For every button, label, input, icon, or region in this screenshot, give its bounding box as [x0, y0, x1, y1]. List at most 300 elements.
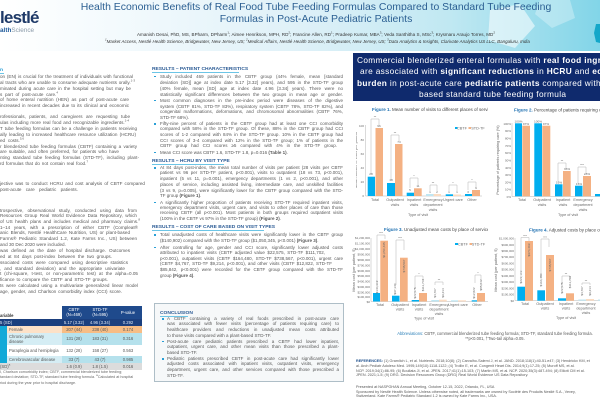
text block: methods: , and standard deviation) and the appropriate univariate [0, 266, 125, 271]
figure 2 axes: 60% [505, 151, 511, 155]
text block: HCRU bullets: emergency department visits, urgent care, and visits to other places of care than those [160, 205, 343, 210]
figure 4 axes: $300,000 [501, 280, 514, 284]
figure 2 category labels [518, 198, 594, 217]
figure 1 legend: CBTF [457, 126, 468, 130]
figure 4 value labels: $164,480 [539, 273, 543, 286]
heading: results HCRU by visit type: RESULTS – HCRU BY VISIT TYPE [152, 158, 230, 164]
text block: presentation and sponsor note [356, 385, 576, 398]
figure 3 title: Figure 3. Unadjusted mean costs by place of service [384, 227, 488, 232]
figure 2 axes: 10% [505, 188, 511, 192]
heading: conclusion: CONCLUSION [160, 310, 193, 316]
text block: patient characteristics bullets: Mean CCI score was CBTF 1.6, STD-TF 1.8, p=0.016 (Table 1). [160, 150, 288, 155]
figure 3 category labels: Urgent care [448, 303, 468, 307]
text block: methods: and 30 Dec 2020 were included. [0, 242, 66, 247]
text block: cost of care bullets: $85,842, p<0.001) were recorded for the CBTF group compared with the STD-TF [160, 267, 343, 272]
figure 3 category labels: department [429, 308, 450, 312]
table header row: (N=595) [92, 312, 108, 317]
figure 2 category labels: Inpatient [556, 198, 571, 202]
table row: CCI score: 1.6 (0.9) [66, 364, 82, 369]
text block: cost of care bullets: (CBTF $4,767, STD-TF $9,214, p<0.001), and other visits (CBTF $12,822, STD-TF [160, 261, 332, 266]
table row: cerebrovascular disease [7, 356, 142, 363]
figure 3 axes: $200,000 [357, 290, 370, 294]
figure 1 category labels: visits [429, 208, 437, 212]
figure 2 axes: 20% [505, 180, 511, 184]
text block: cost of care bullets: After controlling for age, gender and CCI score, significantly lower adjusted costs [160, 245, 343, 250]
panel: conclusion [154, 303, 344, 382]
figure 4 category labels: department [576, 306, 597, 310]
text block: introduction: r blenderized tube feeding formulas (CBTF) containing a variety [0, 144, 137, 149]
text block: conclusion bullets: adjusted costs associated with inpatient visits, outpatient visits, emergency [167, 361, 339, 366]
table row: chronic pulmonary disease: 131 (28) [66, 336, 82, 341]
table row: CCI score: 0.016 [123, 364, 133, 369]
figure 1 value labels: 1 [448, 190, 450, 194]
text block: methods: ts were calculated using a multivariate generalized linear model [0, 283, 138, 288]
table row: cerebrovascular disease: 33 (7) [69, 357, 79, 362]
figure 3 axes: $300,000 [357, 285, 370, 289]
figure 2 category labels: Type of visit [558, 213, 579, 217]
figure 2 axes: 50% [505, 158, 511, 162]
figure 4 category labels [521, 302, 597, 320]
table row: CCI score: 1.8 (1.5) [92, 364, 108, 369]
figure 1 significance brackets: ** [432, 181, 435, 185]
table row: chronic pulmonary disease: Chronic pulmonary [9, 334, 44, 339]
figure 2 category labels: visits [579, 208, 587, 212]
figure 1 axes: 60 [361, 152, 364, 156]
figure 2 category labels: Total [518, 198, 526, 202]
figure 1 axes: 80 [361, 138, 364, 142]
text block: introduction: ulas including more real food and recognizable ingredients.1-4 [0, 119, 129, 125]
figure 4 bars [517, 241, 600, 301]
figure 1 value labels [369, 124, 477, 194]
figure 4 significance brackets: *** [523, 234, 528, 238]
figure 1 category labels: Other [467, 198, 477, 202]
text block: objective: post-acute care pediatric patients. [0, 187, 78, 192]
figure 1 category labels: Type of visit [408, 213, 429, 217]
figure 3 value labels: $4,767 [433, 288, 437, 298]
text block: introduction: nting standard tube feeding formulas (STD-TF), including plant- [0, 155, 139, 160]
text block: conclusion bullets: to those visits compared with a plant-based STD-TF. [167, 333, 271, 338]
figure 4 value labels: $4,767 [580, 286, 584, 296]
figure 4 axes: $500,000 [501, 268, 514, 272]
heading: introduction [0, 68, 4, 74]
text block: patient characteristics bullets: CBTF group had CCI scores ≥5 compared with 4% in the STD-TF group. [160, 143, 337, 148]
figure 3 significance brackets: ** [438, 278, 441, 282]
text block: introduction: ed costs.5,6 [0, 136, 24, 143]
figure 2 axes: 30% [505, 173, 511, 177]
text block: patient characteristics bullets: CCI scores of 3-4 compared with 12% in the STD-TF group; 1% of patients in the [160, 138, 343, 143]
figure 3 category labels: Emergency [429, 303, 449, 307]
text block: patient characteristics bullets: (40% female, mean [SD] age at index date 4.96 [3.34] years). There were no [160, 86, 343, 91]
text block: HCRU bullets: At 84 days post-index, the mean total number of visits per patient (28 visits per CBTF [160, 165, 343, 170]
figure 2 axes: 90% [505, 129, 511, 133]
table row: age: 4.96 (3.34) [90, 320, 110, 325]
figure 4 significance brackets: ** [585, 279, 588, 283]
figure 3 axes: $1,200,000 [355, 236, 370, 240]
table row: cerebrovascular disease: 0.985 [123, 357, 133, 362]
figure 1 significance brackets: * [452, 181, 454, 185]
text block: conclusion bullets: STD-TF. [167, 373, 184, 378]
text block: references: REFERENCES: (1) Gramlich L, et al. Nutrients. 2018;10(8); (2) Carvalho-Salemi J, et al. JAND. 2018;118(1):40-51.e47; (3) Hendrickx KM, et [356, 359, 590, 363]
table footnotes [0, 370, 133, 385]
figure 1 category labels: Outpatient [386, 198, 405, 202]
text block: methods: of US health plans and includes medical and pharmacy claims.8 [0, 217, 140, 224]
figure 4 category labels: Outpatient [536, 302, 555, 306]
text block: introduction: al tracts who are unable to consume adequate nutrients orally.1-3 [0, 78, 135, 84]
figure 1 value labels: 9 [475, 186, 477, 190]
icon: decorative hexagons [488, 0, 600, 48]
figure 3 axes: $1,100,000 [355, 242, 370, 246]
text block: introduction: s part of post-acute care.4 [0, 90, 58, 96]
text block: methods: age, gender, and Charlson comorbidity index (CCI) score. [0, 289, 122, 294]
table header row [0, 306, 142, 319]
text block: conclusion bullets: was associated with fewer visits (percentage of patients requiring care) to [167, 321, 339, 326]
figure 1 value labels: 18 [389, 178, 393, 182]
text block: cost of care bullets: ($140,902) compared with the STD-TF group ($1,050,345, p<0.001) (Figure 3). [160, 238, 318, 243]
table header row: STD-TF [93, 307, 107, 312]
title [81, 2, 551, 25]
authors: Amanish Desai, PhD, MS, BPharm, DPharm1; Aimee Henrikson, MPH, RD2; Francine Allen, RD1; Pradeep Kumar, MBA3; Veda Santhitha S, MSc3; Krysmaru Araujo Torres, MD2 [137, 30, 495, 37]
figure 3 value labels: $1,050,345 [382, 242, 386, 258]
table row: age [0, 318, 142, 326]
text block: patient characteristics bullets: congenital malformations, deformations, and chromosomal abnormalities (CBTF 76%, [160, 109, 343, 114]
figure 2 axes: 0% [507, 195, 511, 199]
figure 4 value labels: $970,469 [527, 243, 531, 256]
figure 1 bars [368, 128, 480, 196]
figure 3 axes: $1,000,000 [355, 247, 370, 251]
text block: HCRU bullets: receiving CBTF (all p<0.001). Most patients in both groups required outpatient visits [160, 210, 343, 215]
text block: conclusion bullets: department, urgent care, and other services compared with those prescribed a [167, 367, 339, 372]
text block: patient characteristics bullets: statistically significant differences between the two groups in mean age or gender. [160, 92, 343, 97]
figure 4 axes: $800,000 [501, 249, 514, 253]
figure 3 category labels: visits [415, 308, 423, 312]
text block: references: al. Arch Pediatr Adolesc Med. 1995;149(10):1118-1122; (4) Trollin E, et al. Congenit Heart Dis. 2014;9(1):17-25; (5) Muroff MS, et al. [356, 364, 575, 368]
figure 3 legend: CBTF [458, 242, 469, 246]
text block: presentation and sponsor note: Presented at NASPGHAN Annual Meeting, October 12-15, 2022, Orlando, FL, USA [356, 385, 494, 389]
table footnotes: riod during the year prior to hospital discharge. [0, 381, 76, 385]
table footnotes: tandard deviation; STD-TF, standard tube feeding formula. a Calculated at hospital [0, 373, 133, 379]
table header row: CBTF [69, 307, 79, 312]
figure 1 axes: 100 [359, 124, 364, 128]
figure 1 significance brackets: * [413, 174, 415, 178]
figure 3 axes: $100,000 [357, 295, 370, 299]
figure 1 significance brackets [371, 115, 476, 191]
figure 1 axes: 0 [362, 194, 364, 198]
figure 4 axes: $200,000 [501, 286, 514, 290]
figure 3 legend: STD-TF [472, 242, 486, 246]
figure 1 value labels: 73 [397, 140, 401, 144]
table row: paraplegia and hemiplegia: Paraplegia and hemiplegia [9, 348, 59, 353]
figure 3 significance brackets: * [477, 271, 479, 275]
heading: introduction: n [0, 68, 3, 73]
figure 4 value labels: $9,214 [588, 286, 592, 296]
text block: conclusion bullets: Post-acute care pediatric patients prescribed a CBTF had lower inpatient, [167, 339, 339, 344]
figure 3 axes: $600,000 [357, 269, 370, 273]
text block: conclusion bullets: based STD-TF. [167, 350, 197, 355]
figure 1 value labels: 1 [456, 190, 458, 194]
figure 2 value labels: 97% [523, 122, 529, 126]
figure 2 significance brackets [558, 159, 586, 183]
heading: results patient characteristics: RESULTS – PATIENT CHARACTERISTICS [152, 67, 248, 72]
figure 4 axes [494, 236, 600, 303]
text block: methods: trospective, observational study, conducted using data from [0, 208, 137, 213]
text block: abbreviations: **p<0.001, †Two-tail alpha=0.05. [465, 336, 525, 341]
text block: patient characteristics bullets: deviation {SD}] age at index date 5.17 [3.32] years), and 595 in the STD-TF group [160, 80, 343, 85]
figure 2 axes: 70% [505, 144, 511, 148]
table side band [0, 326, 7, 363]
figure 3 axes: $900,000 [357, 252, 370, 256]
table row: paraplegia and hemiplegia [7, 345, 142, 356]
text block: methods: ssociated costs were compared using descriptive statistics [0, 260, 128, 265]
text block: HCRU bullets: TF group (Figure 1). [160, 193, 201, 198]
figure 1 category labels: Total [371, 198, 379, 202]
table row: chronic pulmonary disease: disease [9, 339, 23, 344]
figure 3 axes: $400,000 [357, 280, 370, 284]
text block: introduction: rd formulas that do not contain real food.7 [0, 159, 88, 166]
table row: female: Female [9, 327, 23, 332]
table row: chronic pulmonary disease [7, 333, 142, 345]
text block: HCRU bullets: patient vs 96 per STD-TF patient, p<0.001), visits to outpatient (18 vs 73, p<0.001), [160, 170, 343, 175]
figure 1 category labels: department [423, 203, 444, 207]
text block: introduction: T tube feeding formulas can be a challenge in patients receiving [0, 126, 137, 131]
figure 3 value labels: $738,567 [402, 259, 406, 272]
title: Formulas in Post-Acute Pediatric Patients [220, 14, 412, 25]
heading: results cost of care: RESULTS – COST OF CARE BASED ON VISIT TYPES [152, 225, 275, 230]
figure 4 value labels: $111,702 [568, 276, 572, 288]
figure 4 axes: $0 [511, 299, 514, 303]
figure 4 value labels: $22,575 [560, 282, 564, 294]
figure 1 legend: STD-TF [471, 126, 485, 130]
figure 2 axes: 80% [505, 136, 511, 140]
text block: objective [0, 181, 145, 192]
figure 2 category labels: visits [559, 203, 567, 207]
figure 2 axes: Percentage of patients requiring care (%) [496, 125, 500, 195]
table row: CCI score [0, 363, 142, 370]
table row: paraplegia and hemiplegia: 158 (27) [92, 348, 108, 353]
header banner [0, 0, 600, 51]
text block: HCRU bullets: places of service, including assisted living, intermediate care, and unskilled facilities [160, 182, 343, 187]
text block: patient characteristics bullets: Fifty-nine percent of patients in the CBTF group had at least one CCI comorbidity [160, 121, 343, 126]
text block: conclusion bullets: healthcare providers and reductions in unadjusted mean costs attributed [167, 327, 339, 332]
figure 2 axes [496, 122, 600, 199]
text block: methods: Resources Group Real World Evidence Data Repository, which [0, 213, 137, 218]
figure 3 significance brackets: *** [398, 236, 403, 240]
text block: conclusion bullets: outpatient, urgent care, and other mean visits than those prescribed a plant- [167, 344, 339, 349]
figure 3 value labels: $140,902 [375, 280, 379, 293]
text block: introduction: rofessionals, patients, and caregivers are requesting tube [0, 114, 130, 119]
figure 3 category labels: visits [396, 308, 404, 312]
text block: conclusion bullets: Pediatric patients prescribed CBTF in post-acute care had significantly lower [167, 356, 339, 361]
figure 3 significance brackets [377, 231, 481, 289]
callout: key takeaway banner: based standard tube feeding formula [419, 89, 566, 99]
text block: abbreviations [397, 331, 593, 341]
figure 2 axes: 100% [503, 122, 511, 126]
table row: cerebrovascular disease: 43 (7) [95, 357, 105, 362]
text block: references: JPEN. 2021;1-5; (9) DRG. Decision Resources Group (DRG) Real World Evidence US Data Repository. [356, 373, 528, 377]
figure 4 axes: $700,000 [501, 255, 514, 259]
figure 2 axes: 40% [505, 166, 511, 170]
figure 3 value labels: $22,575 [413, 287, 417, 299]
text block: HCRU bullets [154, 165, 343, 221]
figure 1 value labels: 28 [369, 172, 373, 176]
figure 4 category labels: Emergency [576, 302, 596, 306]
figure 1 significance brackets: * [471, 178, 473, 182]
figure 1 axes: 40 [361, 166, 364, 170]
figure 4 category labels: Type of visit [556, 316, 577, 320]
figure 3 bars [373, 241, 485, 302]
figure 3 axes: Mean cost (per patient, $) [352, 248, 356, 292]
text block: patient characteristics bullets [154, 74, 343, 155]
figure 4 value labels: $222,109 [519, 270, 523, 283]
table row: female: 207 (44) [66, 327, 82, 332]
figure 3 significance brackets: *** [379, 231, 384, 235]
figure 2 value labels: 15% [576, 182, 582, 186]
text block: presentation and sponsor note: Switzerland. Kate Farms® Pediatric Standard 1.2 is owned by Kate Farms Inc., USA. [356, 394, 497, 398]
text block: methods: ficance to compare the CBTF and STD-TF groups. [0, 277, 108, 282]
table row: cerebrovascular disease: Cerebrovascular disease [9, 357, 55, 362]
figure 4 significance brackets [521, 234, 590, 285]
figure 4 significance brackets: ** [565, 272, 568, 276]
figure 3 category labels: visits [435, 312, 443, 316]
figure 1 value labels: 2 [436, 190, 438, 194]
text block: cost of care bullets: group (Figure 4). [160, 273, 195, 278]
text block: patient characteristics bullets: Most common diagnoses in the pre-index period were diseases of the digestive [160, 98, 343, 103]
text block: methods: 1–14 years, with a prescription of either CBTF (Compleat® [0, 225, 138, 230]
figure 3 value labels: $111,702 [421, 279, 425, 291]
text block: introduction: of home enteral nutrition (HEN) as part of post-acute care [0, 97, 129, 102]
figure 3 value labels: $85,842 [479, 279, 483, 291]
text block: methods [0, 208, 140, 294]
figure 1 category labels: Urgent care [443, 198, 463, 202]
figure 1 value labels: 11 [416, 184, 420, 188]
text block: objective: jective was to conduct HCRU and cost analysis of CBTF compared [0, 181, 145, 186]
text block: patient characteristics bullets: Study included 469 patients in the CBTF group (44% female, mean [standard [160, 74, 343, 79]
figure 4 value labels: $738,567 [548, 258, 552, 271]
figure 1 category labels: visits [410, 203, 418, 207]
figure 1 category labels: visits [391, 203, 399, 207]
text block: methods: t (chi-square, t-test, or non-parametric test) at the alpha=0.05 [0, 271, 138, 276]
text block: introduction: minated during acute care in the hospital setting but may be [0, 86, 131, 91]
figure 2 category labels: Outpatient [533, 198, 552, 202]
figure 3 value labels [375, 242, 483, 299]
figure 2 value labels: 100% [515, 120, 523, 124]
figure 3 legend [455, 242, 486, 246]
text block: HCRU bullets: A significantly higher proportion of patients receiving STD-TF required inpatient visits, [160, 200, 343, 205]
figure 2 bars [515, 123, 600, 196]
table header row: P-value [121, 310, 135, 314]
figure 1 category labels [371, 198, 477, 217]
figure 1 significance brackets: ** [374, 115, 377, 119]
figure 2 category labels: visits [538, 203, 546, 207]
figure 4 axes: $900,000 [501, 243, 514, 247]
text block: methods: Farms® Pediatric Standard 1.2, Kate Farms Inc., US) between [0, 236, 137, 241]
affiliations: 1Market Access, Nestlé Health Science, Bridgewater, New Jersey, US; 2Medical Affairs, Nestlé Health Science, Bridgewater, New Jersey, US; 3Data Analytics & Insights, Clarivate Analytics US LLC, Bangaluru, India [105, 38, 530, 44]
text block: abbreviations: Abbreviations: CBTF, commercial blenderized tube feeding formula; STD-TF, standard tube feeding formula. [397, 331, 593, 336]
text block: HCRU bullets: (3 vs 9, p=0.005), were significantly lower for the CBTF group compared with the STD- [160, 188, 343, 193]
text block: cost of care bullets [154, 232, 343, 278]
figure 3 category labels: Outpatient [391, 303, 410, 307]
figure 1 category labels: Emergency [423, 198, 443, 202]
figure 4 axes: $100,000 [501, 292, 514, 296]
figure 3 axes [352, 236, 488, 304]
figure 1 value labels: 5 [409, 188, 411, 192]
panel: left column introduction, objective and methods text [0, 68, 145, 294]
text block: patient characteristics bullets: compared with 58% in the STD-TF group. Of these, 88% in the CBTF group had CCI [160, 126, 343, 131]
table row: age: 0.292 [123, 320, 133, 325]
chart: figure 1 mean number of visits [356, 107, 488, 217]
figure 3 axes: $700,000 [357, 264, 370, 268]
callout: key takeaway banner: Commercial blenderized enteral formulas with real food ingre [357, 54, 600, 64]
figure 2 significance brackets: *** [580, 163, 585, 167]
table row: chronic pulmonary disease: 183 (31) [92, 336, 108, 341]
figure 3 category labels [376, 303, 482, 320]
text block: references: NCP. 2019;34(1):86-95; (6) Boullata JI, et al. JPEN. 2017;41(1):15-103; (7) Martin MS, et al. NCP. 2020;35(3):487-494; (8) Elliott CM et al. [356, 369, 585, 373]
figure 2 category labels: Emergency [573, 198, 593, 202]
table row: chronic pulmonary disease: 0.316 [123, 336, 133, 341]
figure 3 axes: $800,000 [357, 258, 370, 262]
text block: introduction: increased in recent decades due to its clinical and economic [0, 103, 129, 108]
text block: introduction: ally leading to increased healthcare resource utilization (HCRU) [0, 132, 136, 137]
figure 2 value labels: 28% [584, 172, 590, 176]
figure 2 category labels: department [573, 203, 594, 207]
text block: methods: ed at 84 days post-index between the two groups. [0, 254, 112, 259]
figure 3 significance brackets: * [418, 272, 420, 276]
text block: cost of care bullets: attributed to inpatient visits (CBTF adjusted value $22,575, STD-TF $111,702, [160, 250, 325, 255]
text block: introduction [0, 74, 139, 166]
text block: patient characteristics bullets: STD-TF 68%). [160, 115, 189, 120]
chart: figure 2 percentage of patients requiring care [496, 108, 600, 217]
figure 1 axes [354, 124, 482, 198]
figure 2 value labels: 35% [564, 167, 570, 171]
title: Health Economic Benefits of Real Food Tube Feeding Formulas Compared to Standard Tube Feeding [81, 2, 551, 13]
figure 4 category labels: Inpatient [559, 302, 574, 306]
text block: cost of care bullets: Total unadjusted costs of healthcare visits were significantly lower in the CBTF group [160, 232, 343, 237]
figure 1 legend [455, 126, 485, 130]
text block: methods: anic Blends, Nestlé HealthCare Nutrition, US) or plant-based [0, 230, 130, 235]
table header row: (N=469) [66, 312, 82, 317]
figure 3 value labels: $97,130 [393, 283, 397, 295]
figure 2 value labels [515, 120, 590, 186]
figure 4 axes: Mean cost (per patient, $) [494, 248, 498, 292]
table row: female: 238 (40) [92, 327, 108, 332]
text block: methods: was defined as the date of hospital discharge. Outcomes [0, 248, 130, 253]
callout: key takeaway banner [353, 53, 600, 101]
figure 3 value labels: $12,822 [472, 287, 476, 299]
table: patient characteristics [0, 306, 142, 385]
figure 1 value labels: 96 [377, 124, 381, 128]
chart: figure 3 unadjusted mean costs [352, 227, 488, 320]
text block: references [356, 359, 590, 377]
figure 1 value labels: 1 [429, 190, 431, 194]
logo: Nestlé Health Science: lestlé [0, 8, 39, 27]
table footnotes: I, Charlson comorbidity index; CBTF, commercial blenderized tube feeding; [0, 370, 122, 374]
text block: patient characteristics bullets: system (CBTF 81%, STD-TF 83%), respiratory system (CBTF 78%, STD-TF 82%), and [160, 104, 343, 109]
figure 4 category labels: visits [541, 306, 549, 310]
figure 1 value labels: 3 [467, 190, 469, 194]
figure 4 axes: $600,000 [501, 262, 514, 266]
figure 4 category labels: visits [562, 306, 570, 310]
panel: results column [152, 67, 343, 278]
logo: Nestlé Health Science: althScience [0, 27, 34, 34]
figure 2 value labels: 100% [534, 120, 542, 124]
figure 4 category labels: visits [582, 311, 590, 315]
figure 4 axes: $1,000,000 [499, 236, 514, 240]
text block: conclusion bullets [162, 316, 339, 378]
text block: introduction: on (EN) is crucial for the treatment of individuals with functional [0, 74, 133, 79]
table row: female [7, 326, 142, 333]
figure 1 significance brackets: ** [394, 131, 397, 135]
text block: cost of care bullets: p<0.001), outpatient visits (CBTF $164,480, STD-TF $738,567, p<0.001), urgent care [160, 256, 343, 261]
figure 3 category labels: Inpatient [412, 303, 427, 307]
